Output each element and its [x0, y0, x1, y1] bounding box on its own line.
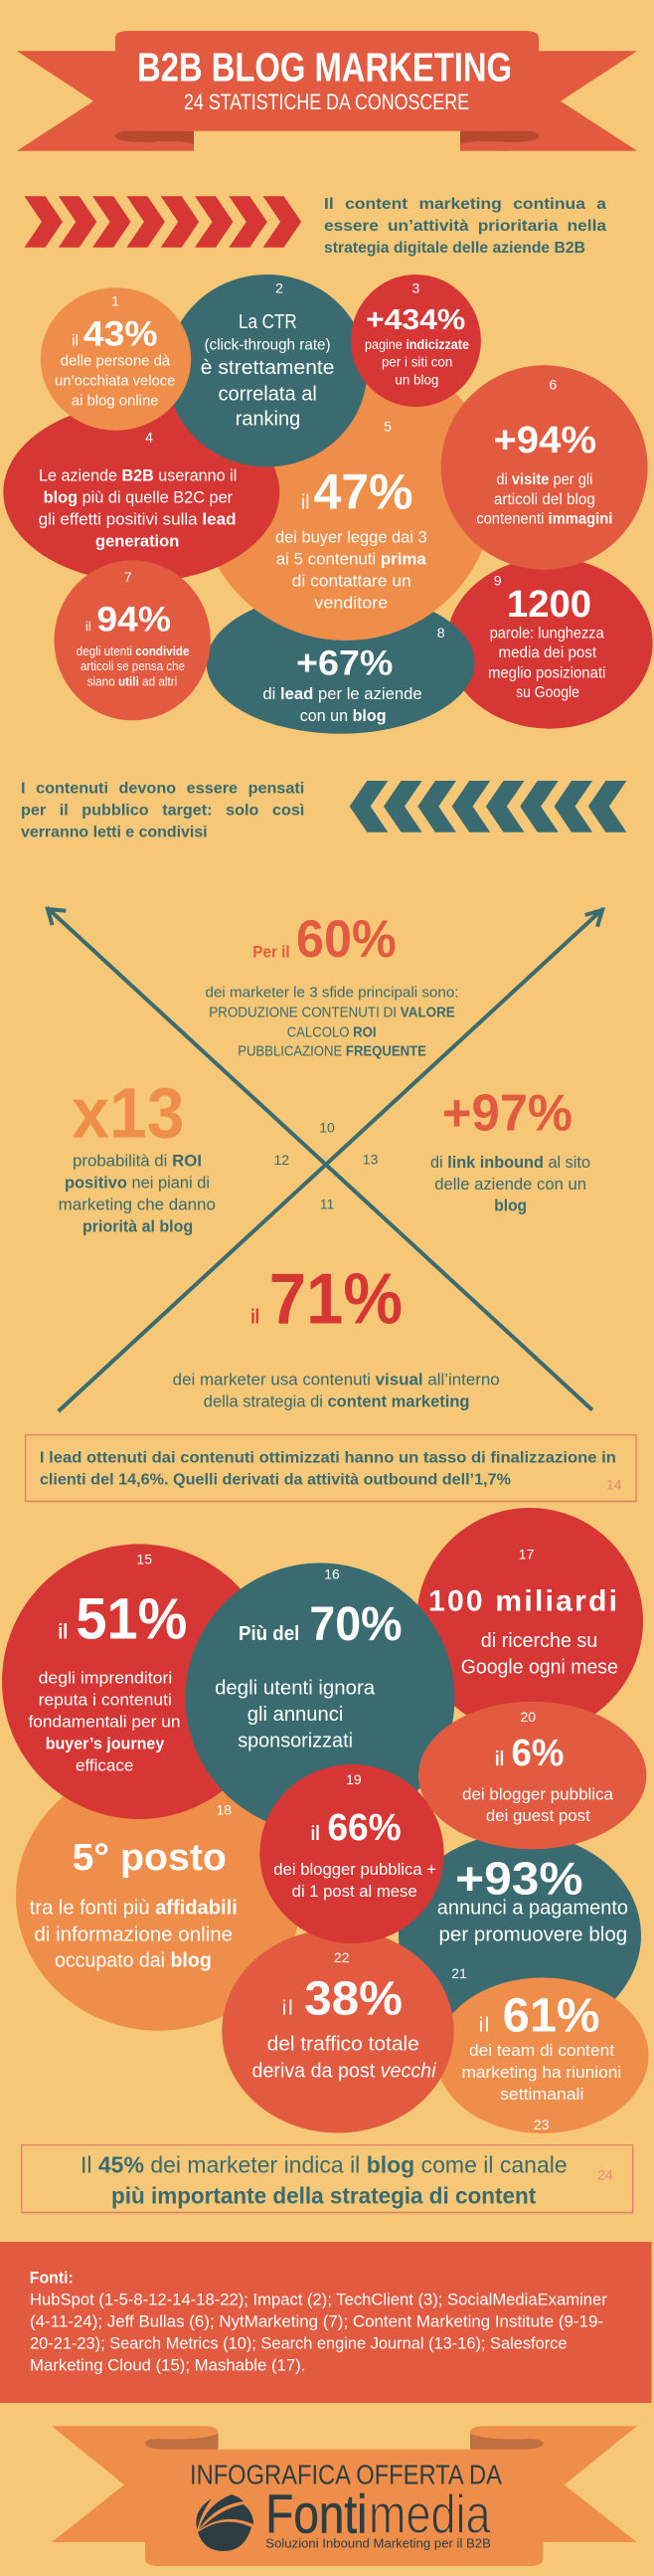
teal chevrons pointing left [350, 781, 626, 832]
bubble 20: dei guest post [486, 1807, 590, 1825]
stat 12: x13: probabilità di ROI [73, 1153, 202, 1171]
logo wordmark: Fonti [265, 2484, 367, 2545]
bubble 4: blog più di quelle B2C per [44, 489, 234, 507]
logo wordmark [265, 2484, 491, 2551]
bubble 6 [441, 365, 648, 570]
bubble 4: gli effetti positivi sulla lead [39, 511, 237, 529]
bubble 20 [418, 1702, 646, 1849]
bubble 2: 2 [275, 279, 283, 295]
bubble 9: parole: lunghezza [490, 626, 604, 643]
bubble 17: di ricerche su [481, 1630, 597, 1652]
bubble 2: correlata al [219, 383, 317, 405]
bubble 1: 43% [83, 314, 158, 353]
bubble 21: 21 [451, 1965, 467, 1981]
bubble 22: 38% [304, 1973, 403, 2026]
bubble 8: 8 [437, 625, 445, 641]
stat 10: 60%: CALCOLO ROI [287, 1024, 377, 1040]
stat 10: 60% [205, 910, 459, 1060]
bubble 22: del traffico totale [267, 2034, 419, 2056]
bubble 1: il [72, 332, 79, 349]
bubble 6: +94% [493, 420, 596, 461]
bubble 6: 6 [550, 377, 558, 393]
bubble 8: +67% [296, 644, 393, 682]
sources panel: (4-11-24); Jeff Bullas (6); NytMarketing (7); Content Marketing Institute (9-19- [30, 2313, 603, 2331]
bubble 9 [446, 558, 653, 729]
bubble 2: è strettamente [201, 357, 334, 379]
stat 11: 71%: dei marketer usa contenuti visual all’interno [173, 1372, 500, 1389]
bubble 16 [185, 1564, 455, 1832]
bubble 16: degli utenti ignora [215, 1677, 376, 1699]
intro text: Il content marketing continua a [324, 196, 606, 213]
bubble 16: 70% [309, 1598, 403, 1651]
intro text: strategia digitale delle aziende B2B [324, 240, 585, 257]
callout box 24 [22, 2145, 634, 2214]
stat 11: 71%: della strategia di content marketing [204, 1393, 470, 1411]
stat 12: x13: marketing che danno [59, 1196, 216, 1213]
sponsor ribbon [52, 2426, 637, 2566]
logo wordmark: Soluzioni Inbound Marketing per il B2B [265, 2536, 491, 2551]
callout box 14: clienti del 14,6%. Quelli derivati da attività outbound dell’1,7% [40, 1471, 511, 1488]
bubble 7: il [85, 618, 91, 634]
bubble 22: deriva da post vecchi [252, 2060, 436, 2082]
bubble 19: di 1 post al mese [292, 1883, 417, 1901]
bubble 21 [399, 1833, 641, 2038]
bubble 17: Google ogni mese [461, 1657, 618, 1679]
text: target audience: verranno letti e condivisi [21, 825, 208, 841]
stat 13: +97%: +97% [442, 1085, 572, 1143]
cross numbers [274, 1119, 379, 1212]
bubble 5: di contattare un [292, 572, 411, 590]
bubble 2: ranking [236, 408, 300, 430]
bubble 20: 6% [511, 1733, 564, 1774]
red chevrons pointing right [24, 196, 301, 248]
stat 10: 60%: PUBBLICAZIONE FREQUENTE [238, 1044, 426, 1060]
bubble 7: siano utili ad altri [87, 675, 177, 689]
bubble 20: 20 [521, 1709, 536, 1725]
stat 13: +97%: delle aziende con un [434, 1176, 586, 1194]
sponsor heading: INFOGRAFICA OFFERTA DA [190, 2459, 502, 2489]
bubble 3: per i siti con [382, 355, 452, 370]
bubble 2: La CTR [239, 311, 297, 333]
title: B2B BLOG MARKETING [137, 45, 512, 91]
bubble 8: con un blog [300, 707, 387, 725]
bubble 5: il [301, 492, 309, 514]
sources panel: HubSpot (1-5-8-12-14-18-22); Impact (2); TechClient (3); SocialMediaExaminer [30, 2292, 607, 2309]
bubble 18: 5° posto [73, 1837, 227, 1879]
stat 11: 71% [173, 1260, 500, 1411]
bubble 2: (click-through rate) [205, 337, 331, 354]
bubble 8 [207, 592, 475, 734]
bubble 5: 47% [314, 464, 413, 520]
bubble 15 [2, 1544, 276, 1819]
callout box 24: Il 45% dei marketer indica il blog come il canale [81, 2151, 568, 2177]
bubble 2 [167, 275, 367, 466]
bubble 1: un’occhiata veloce [55, 373, 175, 390]
bubble 3: pagine indicizzate [365, 337, 469, 352]
stat 10: 60%: Per il [252, 943, 290, 962]
icon: Fontimedia logo [196, 2494, 253, 2551]
stat 11: 71%: il [250, 1307, 259, 1329]
bubble 5: ai 5 contenuti prima [276, 550, 427, 568]
stat 13: +97%: blog [494, 1197, 527, 1215]
bubble 7: 94% [96, 600, 171, 639]
bubble 23: 23 [534, 2116, 550, 2132]
bubble 7 [54, 560, 211, 720]
bubble 15: il [58, 1621, 68, 1644]
sources panel [0, 2242, 652, 2403]
bubble 19: 19 [346, 1771, 362, 1787]
bubble 15: fondamentali per un [28, 1714, 181, 1732]
bubble 7: 7 [124, 569, 132, 585]
bubble 18: occupato dai blog [55, 1950, 212, 1972]
sources panel: Marketing Cloud (15); Mashable (17). [30, 2357, 305, 2375]
bubble 22: il [282, 1998, 293, 2020]
bubble 4 [3, 403, 279, 582]
bubble 8: di lead per le aziende [262, 685, 422, 703]
stat 10: 60%: 60% [296, 910, 397, 969]
bubble 9: 9 [494, 572, 502, 588]
callout box 14 [26, 1435, 637, 1503]
stat 12: x13: x13 [72, 1074, 185, 1153]
bubble 23: 61% [503, 1989, 600, 2042]
bubble 20: dei blogger pubblica [462, 1785, 614, 1803]
stat 10: 60%: PRODUZIONE CONTENUTI DI VALORE [209, 1006, 455, 1021]
callout box 14: I lead ottenuti dai contenuti ottimizzati hanno un tasso di finalizzazione in [40, 1449, 616, 1466]
bubble 15: degli imprenditori [39, 1670, 172, 1688]
bubble 9: su Google [516, 684, 579, 701]
bubble 1: 1 [111, 293, 119, 309]
bubble 5 [198, 344, 494, 641]
bubble 23: settimanali [500, 2086, 583, 2104]
text: target audience: I contenuti devono essere pensati [21, 781, 304, 798]
bubble 3: un blog [395, 373, 438, 388]
bubble 19: 66% [327, 1807, 402, 1849]
text: target audience [21, 781, 304, 841]
cross numbers: 11 [320, 1196, 334, 1212]
bubble 1: ai blog online [72, 392, 159, 409]
bubble 19: dei blogger pubblica + [273, 1861, 436, 1879]
bubble 15: 51% [76, 1587, 187, 1652]
bubble 5: venditore [314, 594, 388, 612]
bubble 19: il [311, 1823, 320, 1845]
bubble 21: per promuovere blog [439, 1924, 627, 1945]
bubble 22: 22 [334, 1949, 350, 1965]
bubble 18 [16, 1762, 301, 2031]
cross numbers: 10 [319, 1119, 335, 1135]
stat 12: x13: positivo nei piani di [65, 1174, 210, 1192]
bubble 16: Più del [239, 1623, 299, 1645]
bubble 23: dei team di content [469, 2042, 614, 2060]
bubble 18: 18 [217, 1801, 232, 1817]
bubble 20: il [495, 1748, 504, 1770]
bubble 17 [416, 1508, 643, 1735]
stat 11: 71%: 71% [269, 1260, 403, 1340]
bubble 9: 1200 [507, 584, 591, 626]
bubble 4: 4 [145, 429, 153, 445]
bubble 15: 15 [136, 1552, 152, 1567]
bubble 16: gli annunci [247, 1704, 343, 1726]
stat 13: +97%: di link inbound al sito [430, 1154, 590, 1172]
bubble 1: delle persone dà [61, 353, 171, 370]
bubble 17: 17 [519, 1546, 535, 1562]
bubble 6: articoli del blog [494, 491, 595, 508]
callout box 24: 24 [597, 2167, 613, 2183]
cross numbers: 12 [274, 1152, 289, 1168]
bubble 4: generation [95, 533, 179, 551]
stat 13: +97% [430, 1085, 590, 1215]
bubble 9: media dei post [499, 644, 597, 661]
bubble 3: 3 [412, 279, 420, 295]
sources panel: 20-21-23); Search Metrics (10); Search engine Journal (13-16); Salesforce [30, 2335, 567, 2353]
bubble 9: meglio posizionati [488, 664, 605, 681]
bubble 19 [259, 1764, 444, 1943]
subtitle: 24 STATISTICHE DA CONOSCERE [184, 90, 469, 114]
text: target audience: per il pubblico target: solo così [21, 803, 304, 820]
bubble 7: articoli se pensa che [81, 659, 185, 673]
bubble 4: Le aziende B2B useranno il [39, 467, 237, 485]
stat 12: x13 [59, 1074, 216, 1235]
stat 10: 60%: dei marketer le 3 sfide principali sono: [205, 986, 459, 1002]
bubble 15: reputa i contenuti [39, 1692, 172, 1710]
bubble 1 [41, 287, 191, 431]
bubble 23: marketing ha riunioni [461, 2064, 621, 2082]
bubble 18: tra le fonti più affidabili [30, 1897, 238, 1919]
bubble 16: sponsorizzati [238, 1731, 353, 1752]
title ribbon [17, 31, 637, 151]
cross numbers: 13 [363, 1151, 379, 1167]
bubble 21: +93% [455, 1852, 583, 1904]
bubble 5: 5 [384, 418, 392, 434]
intro text [324, 196, 606, 257]
bubble 23 [435, 1977, 648, 2133]
bubble 22 [222, 1930, 454, 2132]
bubble 18: di informazione online [34, 1924, 233, 1945]
bubble 17: 100 miliardi [428, 1584, 617, 1617]
logo wordmark: media [369, 2484, 491, 2545]
bubble 6: di visite per gli [496, 471, 592, 488]
bubble 3: +434% [366, 304, 466, 336]
callout box 14: 14 [606, 1476, 622, 1492]
sources panel: Fonti: [30, 2270, 74, 2288]
bubble 15: efficace [76, 1757, 133, 1775]
bubble 21: annunci a pagamento [437, 1897, 628, 1919]
stat 12: x13: priorità al blog [82, 1217, 193, 1235]
bubble 15: buyer’s journey [46, 1736, 165, 1753]
bubble 23: il [479, 2014, 489, 2036]
callout box 24: più importante della strategia di content [111, 2183, 537, 2209]
bubble 5: dei buyer legge dai 3 [275, 528, 427, 546]
bubble 7: degli utenti condivide [77, 644, 190, 658]
intro text: essere un’attività prioritaria nella [324, 218, 606, 235]
crossed arrows [47, 907, 603, 1411]
bubble 16: 16 [324, 1565, 340, 1581]
bubble 6: contenenti immagini [476, 511, 612, 528]
bubble 3 [351, 275, 481, 407]
